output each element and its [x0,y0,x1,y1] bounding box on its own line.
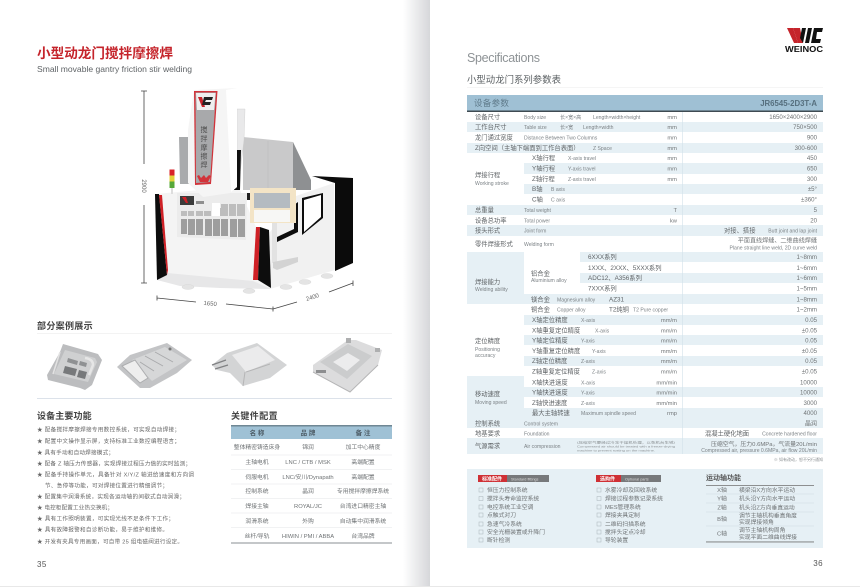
row: air compression: Compressed air, pressure 0.6MPa, air flow 20L/min [701,448,817,454]
logo: WEINOC [785,28,823,54]
row: Z space: mm [667,146,677,152]
row: Y travel [532,164,818,172]
row: B axis: B axis [551,187,565,193]
row: Y positioning: Y-axis [581,338,595,344]
machine: head vertical label [200,125,208,169]
row: welding form: 零件焊接形式 [475,239,513,248]
heading: Specifications: Specifications [467,51,540,65]
row: Y positioning: Y轴定位精度 [532,336,568,344]
row: Y rapid: 10000 [800,390,818,396]
row: Z positioning: Z-axis [581,359,595,365]
row: spindle speed: 4000 [803,410,818,417]
row: copper alloy: T2纯铜 [609,304,629,314]
tag: standard fittings [478,475,549,482]
spec table: header [467,95,823,112]
row: table size: Length×width [583,125,614,131]
row: X rapid: mm/min [656,380,677,386]
row: Z space: Z Space [593,146,612,152]
row: X positioning: mm/m [661,318,677,324]
row: Y repeat: mm/m [661,349,677,355]
list: standard fittings: 电控系统工业空调 [487,503,534,511]
row: C axis: ±360° [801,196,818,204]
row: ADC12: ADC12、A356系列 [588,273,642,282]
row: total weight [475,205,818,214]
group label: welding ability [475,277,508,293]
dimension: height 2900 [140,91,147,283]
group label: aluminium alloy: 铝合金 [531,268,551,278]
list: standard fittings: 安全光栅装置或升降门 [487,528,545,536]
row: Z space [475,143,818,152]
dimension: depth 2400: 2400 [305,293,321,303]
row: air compression: machine to prevent rusting on the machine. [577,448,655,452]
subtitle: English: Small movable gantry friction stir welding [37,64,192,74]
tag: standard fittings: Standard fittings [511,477,539,481]
spec table [467,95,823,454]
group label: welding ability: 焊接能力 [475,277,500,286]
machine: rear guard black [312,176,353,271]
group label: working stroke: Working stroke [475,181,509,187]
list: main functions: ★ 开发有夹具专用画面，可自带 25 组电磁阀进行设定。 [37,538,183,546]
row: Z repeat: Z-axis [592,370,606,376]
list: main functions: ★ 配置中文操作显示屏，支持标准工业数控编程语言； [37,437,180,445]
table: axis functions: 运动轴功能 [706,473,741,482]
row: foundation: Foundation [524,432,550,438]
table: key components: 锦润 [302,443,314,451]
row: 6XXX: 1~8mm [796,254,817,261]
table: axis functions: C轴 [717,530,727,538]
list: main functions: 节、急停等功能，可对焊接位置进行精细调节； [45,482,168,490]
row: Y repeat: Y-axis [592,349,606,355]
row: Z repeat: mm/m [661,370,677,376]
row: Z travel [532,174,818,183]
row: Z rapid: Z-axis [581,401,595,407]
group label: positioning accuracy: accuracy [475,353,496,359]
row: 7XXX [588,284,817,292]
list: optional parts: 搅拌头定点冷却 [605,528,646,536]
row: Z positioning: 0.05 [805,358,818,365]
list: main functions [37,426,194,546]
table: key components: 品 牌 [301,428,316,437]
row: X travel: 450 [807,155,818,162]
table: axis functions: 调节主轴机构垂直角度 [739,512,797,520]
row: Y rapid: mm/min [656,390,677,396]
table: key components: 自动集中润滑系统 [340,517,386,525]
row: Z repeat [532,366,818,376]
machine: tower light [170,170,174,194]
heading: main functions: 设备主要功能 [37,410,92,421]
row: joint form: 接头形式 [475,226,501,234]
row: air compression: (压缩空气要经过冷冻干燥机处理，以免机台生锈) [577,440,675,444]
machine: rear grey housing [179,137,311,190]
row: X positioning: 0.05 [805,317,818,324]
row: welding form: 平面直线焊缝、二维曲线焊缝 [738,236,817,244]
row: foundation [475,428,817,438]
row: air compression [475,440,817,454]
row: body size: 设备尺寸 [475,112,500,121]
row: C axis: C axis [551,198,566,204]
page number 35: 35 [37,560,47,569]
list: optional parts: 二维码扫描系统 [605,520,646,528]
table: key components: LNC / CTB / MSK [285,460,331,466]
row: Y positioning: 0.05 [805,338,818,344]
row: X positioning: X轴定位精度 [532,315,568,324]
row: body size [475,112,818,121]
list: main functions: ★ 配备手持操作单元，具备针对 X/Y/Z 轴进给速度和方向调 [37,470,194,478]
logo: WEINOC: WEINOC [785,45,823,54]
table: key components: 伺服电机 [245,473,269,481]
row: control system [475,418,817,428]
machine illustration with dimensions [140,88,353,312]
group label: positioning accuracy: 定位精度 [475,336,501,345]
row: joint form: Joint form [524,228,546,234]
case part 3 [212,343,287,386]
row: joint form [475,226,818,234]
group label: aluminium alloy: Aluminium alloy [531,278,567,284]
table: key components: 控制系统 [245,487,269,495]
row: X repeat [532,326,818,334]
row: Y repeat [532,346,818,355]
row: air compression: 压缩空气，压力0.6MPa，气流量20L/min [711,440,817,448]
row: Y positioning: mm/m [661,338,677,344]
list: main functions: ★ 配置集中润滑系统，实现各运动轴的间歇式自动润滑； [37,492,185,500]
row: table size: Table size [524,125,547,131]
row: column distance: mm [667,136,677,142]
table: key components: HIWIN / PMI / ABBA [282,534,334,540]
row: X travel: X轴行程 [532,153,556,162]
row: spindle speed: 最大主轴转速 [532,408,570,417]
row: Y rapid: Y-axis [581,390,595,396]
list: main functions: ★ 配备 Z 轴压力传感器，实现焊接过程压力值的实时监测； [37,460,191,468]
table: axis functions: B轴 [717,515,727,523]
list: optional parts: 焊接过程参数记录系统 [605,494,663,502]
row: total power: kw [670,218,678,224]
group label: positioning accuracy [475,336,501,359]
row: total power [475,216,818,224]
row: 1XXX [588,263,817,272]
row: welding form [475,236,817,252]
dimension: height 2900: 2900 [140,179,146,193]
row: body size: 1650×2400×2900 [769,114,818,121]
list: optional parts: 水雾冷却及回收系统 [605,486,657,494]
table: axis functions: 实现焊接倾角 [739,518,774,526]
row: X travel: mm [667,156,677,162]
group label: aluminium alloy [531,268,567,284]
row: control system: 控制系统 [475,418,501,428]
row: X repeat: ±0.05 [802,328,818,334]
row: Y rapid: Y轴快进速度 [532,388,568,396]
list: main functions: ★ 具有手动和自动焊接模式； [37,448,114,456]
row: 7XXX: 7XXX系列 [588,284,617,292]
machine: control panel [247,188,296,223]
table: key components: ROYAL/JC [294,504,322,510]
row: control system: 晶润 [805,420,817,428]
table: key components: 丝杆/导轨 [245,532,270,540]
row: total weight: Total weight [524,208,551,214]
row: column distance: Distance Between Two Columns [524,136,598,142]
row: total power: Total power [524,218,550,224]
table: axis functions [706,473,814,542]
group label: working stroke [475,170,509,187]
row: table size: 750×500 [793,124,818,131]
row: Y repeat: Y轴重复定位精度 [532,346,581,355]
group label: moving speed [475,389,507,406]
row: body size: Body size [524,115,546,121]
table: axis functions: 机头沿Z方向垂直运动 [739,504,795,512]
row: Z positioning: mm/m [661,359,677,365]
row: air compression: Air compression [524,444,561,450]
case part 1 [47,344,102,390]
list: optional parts [597,486,663,544]
table: key components: 整体精密铸造床身 [234,443,280,451]
table: key components: 主轴电机 [245,458,269,466]
machine: spindle head cover [188,88,237,197]
list: standard fittings: 恒压力控制系统 [487,486,528,494]
row: X travel [532,153,818,162]
dimension: depth 2400 [273,280,353,309]
row: spindle speed: rmp [667,411,677,417]
table: axis functions: 横梁沿X方向水平运动 [739,486,795,494]
row: body size: Length×width×height [593,115,641,121]
row: Z positioning [532,356,818,365]
row: body size: 长×宽×高 [560,114,581,121]
list: main functions: ★ 配备搅拌摩擦焊接专用数控系统，可实现自动焊接； [37,426,180,434]
tag: optional parts: 选购件 [600,476,615,482]
row: column distance: 900 [807,134,818,142]
row: C axis: C轴 [532,194,543,204]
row: Z travel: mm [667,177,677,183]
group label: welding ability: Welding ability [475,287,508,293]
machine: right side wall [270,183,335,289]
row: body size: mm [667,115,677,121]
row: Y travel: Y-axis travel [568,166,596,172]
row: X rapid: X-axis [581,380,596,386]
list: main functions: ★ 电控柜配置工业热交换机； [37,504,113,512]
row: 6XXX: 6XXX系列 [588,252,617,261]
row: B axis: ±5° [808,186,818,193]
row: air compression: Compressed air should be treated with a freeze-drying [577,444,675,448]
machine: head vertical label: 摩 [200,143,208,152]
row: X travel: X-axis travel [568,156,596,162]
spec table: header: JR6545-2D3T-A [760,99,817,108]
row: Y travel: 650 [807,166,818,172]
row: Z repeat: Z轴重复定位精度 [532,366,581,376]
row: table size: 长×宽 [560,124,573,131]
machine: head vertical label: 擦 [200,152,208,160]
group label: moving speed: Moving speed [475,400,507,406]
table: key components [231,425,392,544]
row: X positioning: X-axis [581,318,596,324]
row: Y rapid [532,388,818,396]
row: 1XXX: 1~6mm [796,265,817,272]
row: X rapid [532,378,818,386]
table: key components: 外购 [302,517,314,525]
row: copper alloy: 铜合金 [531,304,551,314]
table: axis functions: Y轴 [717,494,727,502]
row: copper alloy: 1~2mm [796,306,817,314]
row: Z positioning: Z轴定位精度 [532,356,568,365]
machine: head vertical label: 拌 [200,134,208,143]
row: joint form: 对接、搭接 [724,226,756,234]
table: key components: 高端配置 [351,473,375,481]
group label: moving speed: 移动速度 [475,389,501,398]
row: X repeat: X轴重复定位精度 [532,326,581,334]
row: foundation: 地基要求 [475,428,501,438]
table: axis functions: 实现平面二维曲线焊接 [739,533,797,541]
machine: front window grid [177,193,247,240]
row: foundation: Concrete hardened floor [762,432,817,438]
list: main functions: ★ 具有工作照明装置，可实现光线不足条件下工作； [37,514,174,522]
row: magnesium alloy: 镁合金 [531,294,551,304]
table: axis functions: Z轴 [717,504,727,512]
row: C axis [532,194,818,204]
table: axis functions: 调节主轴机构周角 [739,526,786,534]
tag: optional parts [596,475,661,482]
row: table size [475,122,818,131]
row: column distance [475,132,818,142]
row: magnesium alloy: 1~8mm [796,296,817,304]
row: Z repeat: ±0.05 [802,368,818,376]
row: Y travel: mm [667,166,677,172]
row: spindle speed: Maximum spindle speed [581,411,636,417]
row: welding form: Welding form [524,242,554,248]
machine: feet [182,274,333,294]
list: optional parts: 导轮装置 [605,536,628,544]
table: key components: 专用搅拌摩擦焊系统 [337,487,389,495]
note: subject to change: ※ 如有改动，恕不另行通知 [774,456,823,462]
list: optional parts: MES管理系统 [605,503,641,511]
row: 1XXX: 1XXX、2XXX、5XXX系列 [588,263,662,272]
subheading: spec table title: 小型动龙门系列参数表 [467,74,562,85]
row: 7XXX: 1~5mm [796,286,817,292]
panel: options [467,469,823,548]
table: key components: 备 注 [356,428,371,437]
row: B axis: B轴 [532,184,542,193]
table: key components: 台湾品牌 [351,532,375,540]
tag: optional parts: Optional parts [625,477,649,481]
row: Z rapid: 3000 [803,400,818,407]
list: standard fittings: 断针检测 [487,536,510,544]
row: Z rapid: Z轴快进速度 [532,398,568,407]
row: B axis [532,184,818,193]
row: Z rapid [532,398,818,407]
table: key components: 焊接主轴 [245,502,269,510]
row: column distance: 龙门通过宽度 [475,132,513,142]
list: standard fittings: 急速气冷系统 [487,520,522,528]
spec table: header: 设备参数 [474,98,509,108]
machine: operator arm [272,223,298,270]
group label: working stroke: 焊接行程 [475,170,501,179]
list: standard fittings [479,486,545,544]
table: key components: 高端配置 [351,458,375,466]
row: copper alloy [531,304,817,314]
page number 36: 36 [813,559,823,568]
row: joint form: Butt joint and lap joint [768,228,818,234]
case photos [47,338,382,392]
heading: case showcase: 部分案例展示 [37,320,93,331]
row: X rapid: X轴快进速度 [532,378,568,386]
spec table: row bands [467,112,823,454]
heading: key components: 关键件配置 [231,410,278,421]
row: X positioning [532,315,818,324]
table: axis functions: 机头沿Y方向水平运动 [739,494,795,502]
row: magnesium alloy [531,294,817,304]
row: foundation: 混凝土硬化地面 [705,428,749,438]
row: Y positioning [532,336,818,344]
row: X repeat: X-axis [595,328,610,334]
list: main functions: ★ 具有故障报警和自诊断功能，易于维护和维修。 [37,526,168,534]
row: Z space: Z向空间（主轴下端面到工作台表面） [475,143,580,152]
row: table size: mm [667,125,677,131]
row: welding form: Plane straight line weld, 2D curve weld [730,246,817,252]
table: axis functions: X轴 [717,486,727,494]
row: magnesium alloy: Magnesium alloy [557,298,596,304]
table: key components: 加工中心精度 [346,443,381,451]
table: key components: LNC/安川/Dynapath [282,473,334,481]
row: total weight: 5 [814,207,818,214]
table: key components: 名 称 [250,428,265,437]
row: ADC12 [588,273,817,282]
row: Y travel: Y轴行程 [532,164,556,172]
row: Z travel: Z-axis travel [568,177,596,183]
row: 6XXX [588,252,817,261]
dimension: width 1650: 1650 [203,301,218,308]
machine: front body [155,190,271,289]
row: ADC12: 1~6mm [796,275,817,282]
machine: guide column [234,109,245,190]
tag: standard fittings: 标准配件 [482,476,502,482]
row: copper alloy: Copper alloy [557,308,586,314]
row: total weight: T [673,208,677,214]
row: control system: Control system [524,422,558,428]
table: key components: 润滑系统 [245,517,269,525]
table: key components: 晶润 [302,487,314,495]
row: total power: 20 [810,218,818,224]
row: copper alloy: T2 Pure copper [633,308,668,314]
case part 2 [117,343,192,388]
title: Chinese: 小型动龙门搅拌摩擦焊 [37,45,173,61]
row: spindle speed [532,408,818,417]
row: Z rapid: mm/min [656,401,677,407]
row: Y repeat: ±0.05 [802,348,818,355]
list: standard fittings: 搅拌头寿命监控系统 [487,494,539,502]
row: Z travel: 300 [807,176,818,183]
row: magnesium alloy: AZ31 [609,296,625,304]
row: Z travel: Z轴行程 [532,174,555,183]
row: total power: 设备总功率 [475,216,506,224]
list: standard fittings: 点触式对刀 [487,511,516,519]
row: Z space: 300-600 [795,145,818,152]
row: X repeat: mm/m [661,328,677,334]
dimension: width 1650 [157,296,273,312]
group label: positioning accuracy: Positioning [475,347,500,353]
row: total weight: 总重量 [475,205,495,214]
row: X rapid: 10000 [800,380,818,386]
machine: head vertical label: 搅 [200,125,208,134]
table: key components: 台湾进口精密主轴 [340,502,386,510]
machine: head vertical label: 焊 [200,160,208,169]
row: table size: 工作台尺寸 [475,122,506,131]
list: optional parts: 焊接夹具定制 [605,511,640,519]
case part 4 [313,338,382,392]
row: air compression: 气源需求 [475,441,501,450]
